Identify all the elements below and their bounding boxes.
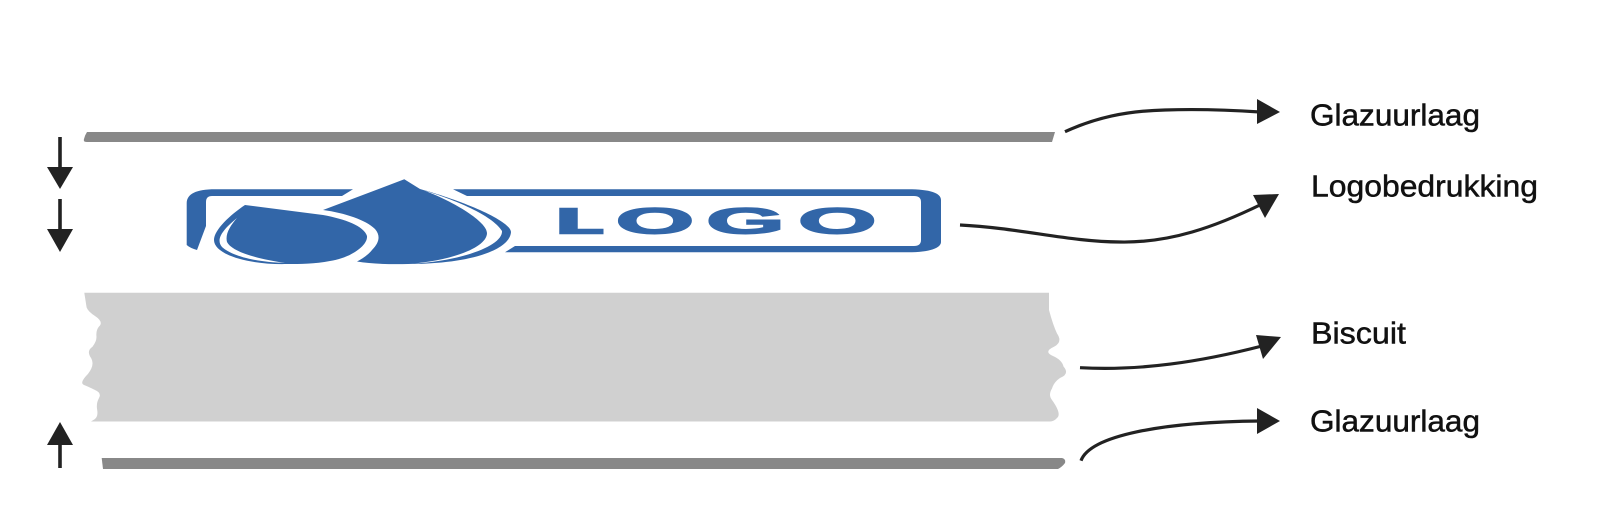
wordmark L foot trim	[604, 204, 616, 238]
logo frame	[187, 189, 941, 252]
top glaze layer bar	[84, 132, 1055, 142]
arrow: up	[47, 422, 73, 468]
logo drop: large	[323, 179, 511, 264]
bottom glaze layer bar	[102, 458, 1065, 469]
arrow: to logo print label	[960, 194, 1279, 242]
logo drop: large highlight	[408, 190, 502, 264]
arrow: to biscuit label	[1080, 335, 1281, 368]
biscuit layer	[82, 293, 1066, 422]
logo wordmark: LOGO	[554, 201, 877, 242]
label: biscuit: Biscuit	[1311, 316, 1406, 350]
arrow: down 1	[47, 137, 73, 189]
arrow: to bottom glaze label	[1081, 408, 1280, 461]
arrow: to top glaze label	[1065, 99, 1280, 132]
logo print	[187, 179, 941, 264]
label: bottom glaze: Glazuurlaag	[1310, 404, 1480, 438]
label: logo print: Logobedrukking	[1311, 168, 1538, 204]
arrow: down 2	[47, 199, 73, 252]
logo drop: small highlight	[220, 218, 285, 263]
label: top glaze: Glazuurlaag	[1310, 98, 1480, 132]
logo drop: small	[214, 205, 367, 264]
